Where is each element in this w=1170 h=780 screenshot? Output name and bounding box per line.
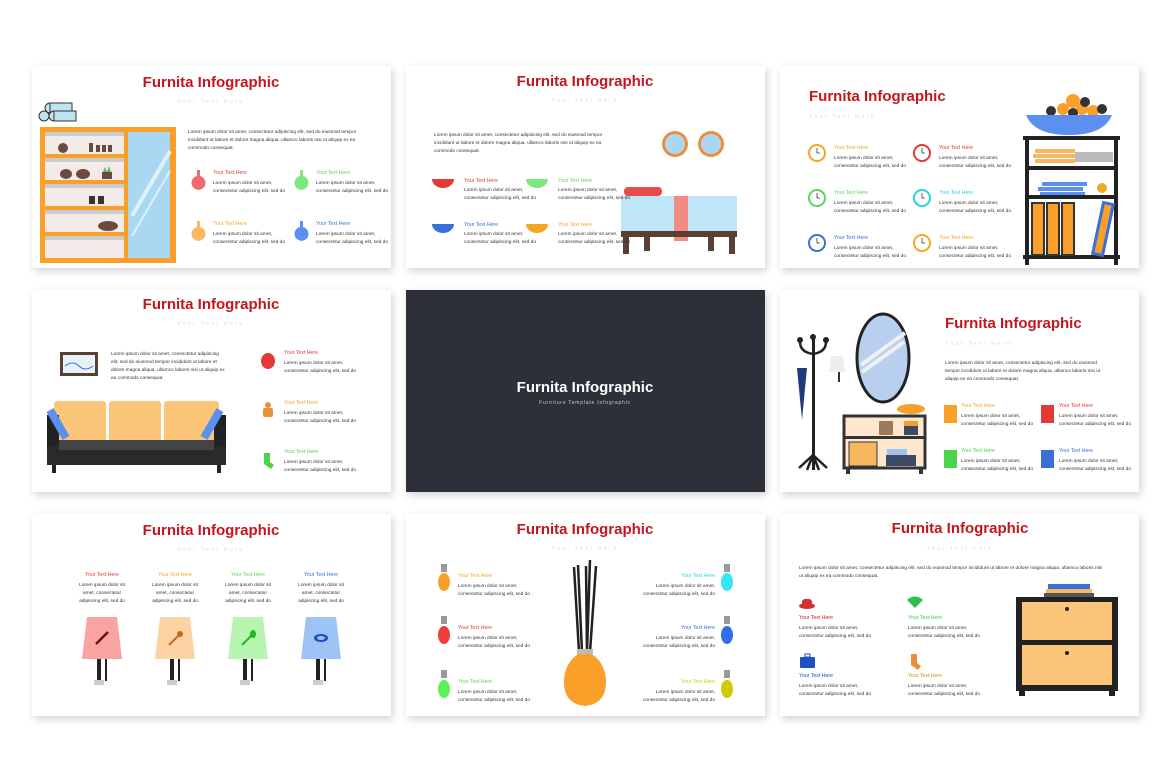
lamp column 2: Lorem ipsum dolor sit [152,582,199,588]
item 3 stocking: Your Text Here [284,449,318,455]
item 2 green bowl [526,178,630,201]
item 2 fan [907,597,980,639]
subtitle: Your Text Here [178,321,244,327]
clock items: Lorem ipsum dolor sit amet, [939,155,998,161]
right bulbs: Lorem ipsum dolor sit amet, [656,689,715,695]
item 2 green: consectetur adipiscing elit, sed do [316,188,388,194]
item 4 blue [295,221,388,245]
slide 6: coat rack and mirror [780,290,1139,492]
illustration: fruit bowl on shelf [1023,94,1120,265]
item 1 hat: consectetur adipiscing elit, sed do [799,633,871,639]
slide 9: nightstand [780,514,1139,716]
item 4 blue: Your Text Here [1059,448,1093,454]
item 1 lantern [261,350,356,374]
paragraph: ut aliquip ex ea commodo consequat. [799,573,878,579]
lamp column 1: Lorem ipsum dolor sit [79,582,126,588]
title: Furnita Infographic [143,296,279,313]
illustration: coat rack, lamp, mirror, cabinet [797,314,925,474]
item 3 stocking: consectetur adipiscing elit, sed do [284,467,356,473]
lamp column 2 [152,572,199,685]
item 2 green bowl: Lorem ipsum dolor sit amet, [558,187,617,193]
item 1 orange: Lorem ipsum dolor sit amet, [961,413,1020,419]
subtitle: Your Text Here [945,341,1012,347]
clock items: Lorem ipsum dolor sit amet, [939,200,998,206]
subtitle: Your Text Here [178,547,244,553]
item 4 sock: Your Text Here [908,673,942,679]
right bulbs [643,564,733,703]
item 1 red bowl: Your Text Here [464,178,498,184]
lamp column 4 [298,572,345,685]
title: Furnita Infographic [945,315,1082,332]
sofa [47,401,226,473]
paragraph: Lorem ipsum dolor sit amet, consectetur adipiscing elit, sed do eiusmod tempor [434,132,603,138]
item 1 lantern: Lorem ipsum dolor sit amet, [284,360,343,366]
item 2 gingerbread: Your Text Here [284,400,318,406]
paragraph: Lorem ipsum dolor sit amet, consectetur adipiscing elit, sed do eiusmod [945,360,1097,366]
item 1 red bowl [432,178,536,201]
illustration: mirrors and table [621,131,737,254]
right bulbs: Lorem ipsum dolor sit amet, [656,583,715,589]
paragraph: incididunt ut labore et dolore magna aliqua. ullamco laboris nisi ut aliquip ex ea [434,140,602,146]
item 3 blue bowl: Your Text Here [464,222,498,228]
paragraph: Lorem ipsum dolor sit amet, consectetur adipiscing elit, sed do eiusmod tempor incididunt ut labore et dolore magna aliqua. ullamco laboris nisi [799,565,1102,571]
left bulbs: Lorem ipsum dolor sit amet, [458,583,517,589]
right bulbs: consectetur adipiscing elit, sed do [643,643,715,649]
left bulbs: consectetur adipiscing elit, sed do [458,697,530,703]
item 4 orange bowl [526,222,630,245]
slide 2: table with bowls [406,66,765,268]
item 1 lantern: Your Text Here [284,350,318,356]
left bulbs: Lorem ipsum dolor sit amet, [458,635,517,641]
item 3 green: consectetur adipiscing elit, sed do [961,466,1033,472]
lamp column 2: amet, consectetur [156,590,194,596]
paragraph: Lorem ipsum dolor sit amet, consectetur adipiscing elit, sed do eiusmod tempor [188,129,357,135]
item 3 suitcase: consectetur adipiscing elit, sed do [799,691,871,697]
clock items [809,145,1011,259]
clock items: consectetur adipiscing elit, sed do [939,208,1011,214]
item 3 orange: consectetur adipiscing elit, sed do [213,239,285,245]
left bulbs: Your Text Here [458,573,492,579]
item 1 red bowl: consectetur adipiscing elit, sed do [464,195,536,201]
clock items: Lorem ipsum dolor sit amet, [834,200,893,206]
clock items: Your Text Here [939,145,973,151]
item 3 blue bowl [432,222,536,245]
clock items: Lorem ipsum dolor sit amet, [834,155,893,161]
item 2 red: Lorem ipsum dolor sit amet, [1059,413,1118,419]
clock items: Your Text Here [939,190,973,196]
item 3 green: Lorem ipsum dolor sit amet, [961,458,1020,464]
item 4 sock: consectetur adipiscing elit, sed do [908,691,980,697]
item 2 red: Your Text Here [1059,403,1093,409]
item 1 orange: Your Text Here [961,403,995,409]
slide 4: sofa [32,290,391,492]
clock items: consectetur adipiscing elit, sed do [834,253,906,259]
item 1 hat: Lorem ipsum dolor sit amet, [799,625,858,631]
item 2 gingerbread: Lorem ipsum dolor sit amet, [284,410,343,416]
lamp column 4: Lorem ipsum dolor sit [298,582,345,588]
lamp column 1: adipiscing elit, sed do [79,598,125,604]
item 3 blue bowl: consectetur adipiscing elit, sed do [464,239,536,245]
illustration: shelf with mirror [39,103,176,263]
paragraph: tempor incididunt ut labore et dolore magna aliqua. ullamco laboris nisi ut [945,368,1101,374]
clock items: consectetur adipiscing elit, sed do [834,163,906,169]
left bulbs: Lorem ipsum dolor sit amet, [458,689,517,695]
item 2 fan: consectetur adipiscing elit, sed do [908,633,980,639]
item 2 gingerbread: consectetur adipiscing elit, sed do [284,418,356,424]
item 1 hat [799,599,871,639]
subtitle: Your Text Here [809,114,876,120]
subtitle: Your Text Here [552,546,618,552]
item 1 lantern: consectetur adipiscing elit, sed do [284,368,356,374]
item 1 red: Lorem ipsum dolor sit amet, [213,180,272,186]
slide 5: dark cover [406,290,765,492]
slide 8: reed diffuser [406,514,765,716]
item 1 red: consectetur adipiscing elit, sed do [213,188,285,194]
title: Furnita Infographic [892,520,1028,537]
item 2 green: Lorem ipsum dolor sit amet, [316,180,375,186]
clock items: Your Text Here [834,235,868,241]
item 3 orange: Lorem ipsum dolor sit amet, [213,231,272,237]
cover subtitle: Furniture Template Infographic [539,400,631,406]
item 4 blue: consectetur adipiscing elit, sed do [316,239,388,245]
item 2 green bowl: consectetur adipiscing elit, sed do [558,195,630,201]
item 3 orange [192,221,285,245]
title: Furnita Infographic [517,73,653,90]
item 3 stocking: Lorem ipsum dolor sit amet, [284,459,343,465]
item 1 orange [944,403,1033,427]
right bulbs: consectetur adipiscing elit, sed do [643,697,715,703]
cover title: Furnita Infographic [517,379,653,396]
lamp column 4: amet, consectetur [302,590,340,596]
item 2 red: consectetur adipiscing elit, sed do [1059,421,1131,427]
item 3 stocking [264,449,356,473]
paragraph: commodo consequat. [434,148,480,154]
paragraph: dolore magna aliqua. ullamco laboris nisi ut aliquip ex [111,367,225,373]
item 1 orange: consectetur adipiscing elit, sed do [961,421,1033,427]
item 2 green bowl: Your Text Here [558,178,592,184]
lamp column 1 [79,572,126,685]
lamp column 4: Your Text Here [304,572,338,578]
paragraph: elit, sed do eiusmod tempor incididunt ut labore et [111,359,218,365]
clock items: consectetur adipiscing elit, sed do [834,208,906,214]
left bulbs: consectetur adipiscing elit, sed do [458,591,530,597]
clock items: consectetur adipiscing elit, sed do [939,163,1011,169]
title: Furnita Infographic [517,521,653,538]
right bulbs: Your Text Here [681,573,715,579]
item 2 fan: Your Text Here [908,615,942,621]
item 2 green [295,170,388,194]
item 2 fan: Lorem ipsum dolor sit amet, [908,625,967,631]
lamp column 4: adipiscing elit, sed do [298,598,344,604]
item 3 suitcase [799,654,871,697]
item 4 blue: consectetur adipiscing elit, sed do [1059,466,1131,472]
item 3 suitcase: Lorem ipsum dolor sit amet, [799,683,858,689]
item 4 orange bowl: Your Text Here [558,222,592,228]
item 1 red: Your Text Here [213,170,247,176]
item 4 sock [908,654,980,697]
left bulbs [438,564,530,703]
item 4 sock: Lorem ipsum dolor sit amet, [908,683,967,689]
right bulbs: Your Text Here [681,625,715,631]
slide 3: clocks and bookshelf [780,66,1139,268]
lamp column 3: adipiscing elit, sed do [225,598,271,604]
paragraph: Lorem ipsum dolor sit amet, consectetur adipiscing [111,351,219,357]
item 2 green: Your Text Here [316,170,350,176]
item 4 orange bowl: consectetur adipiscing elit, sed do [558,239,630,245]
item 1 red bowl: Lorem ipsum dolor sit amet, [464,187,523,193]
left bulbs: Your Text Here [458,625,492,631]
item 2 gingerbread [263,400,356,424]
paragraph: ea commodo consequat. [111,375,164,381]
item 1 red [192,170,285,194]
vase with reeds [564,560,606,706]
item 4 blue [1041,448,1131,472]
item 2 red [1041,403,1131,427]
paragraph: incididunt ut labore et dolore magna aliqua. ullamco laboris nisi ut aliquip ex ea [188,137,356,143]
right bulbs: consectetur adipiscing elit, sed do [643,591,715,597]
item 1 hat: Your Text Here [799,615,833,621]
item 3 blue bowl: Lorem ipsum dolor sit amet, [464,231,523,237]
right bulbs: Lorem ipsum dolor sit amet, [656,635,715,641]
paragraph: commodo consequat. [188,145,234,151]
title: Furnita Infographic [809,88,946,105]
item 3 suitcase: Your Text Here [799,673,833,679]
title: Furnita Infographic [143,522,279,539]
lamp column 3: Lorem ipsum dolor sit [225,582,272,588]
item 4 blue: Lorem ipsum dolor sit amet, [316,231,375,237]
clock items: Lorem ipsum dolor sit amet, [834,245,893,251]
slide 1: bookshelf [32,66,391,268]
lamp column 1: amet, consectetur [83,590,121,596]
lamp column 2: adipiscing elit, sed do [152,598,198,604]
item 3 orange: Your Text Here [213,221,247,227]
clock items: Your Text Here [834,145,868,151]
lamp column 2: Your Text Here [158,572,192,578]
lamp column 3: amet, consectetur [229,590,267,596]
clock items: Your Text Here [834,190,868,196]
item 4 blue: Lorem ipsum dolor sit amet, [1059,458,1118,464]
picture frame [60,352,98,376]
clock items: consectetur adipiscing elit, sed do [939,253,1011,259]
lamp column 3 [225,572,272,685]
clock items: Your Text Here [939,235,973,241]
left bulbs: Your Text Here [458,679,492,685]
lamp column 3: Your Text Here [231,572,265,578]
subtitle: Your Text Here [552,98,618,104]
subtitle: Your Text Here [927,546,993,552]
item 3 green [944,448,1033,472]
slide 7: lamps [32,514,391,716]
left bulbs: consectetur adipiscing elit, sed do [458,643,530,649]
right bulbs: Your Text Here [681,679,715,685]
item 4 blue: Your Text Here [316,221,350,227]
paragraph: aliquip ex ea commodo consequat. [945,376,1019,382]
item 3 green: Your Text Here [961,448,995,454]
subtitle: Your Text Here [178,99,244,105]
nightstand [1016,584,1118,696]
title: Furnita Infographic [143,74,279,91]
lamp column 1: Your Text Here [85,572,119,578]
clock items: Lorem ipsum dolor sit amet, [939,245,998,251]
item 4 orange bowl: Lorem ipsum dolor sit amet, [558,231,617,237]
